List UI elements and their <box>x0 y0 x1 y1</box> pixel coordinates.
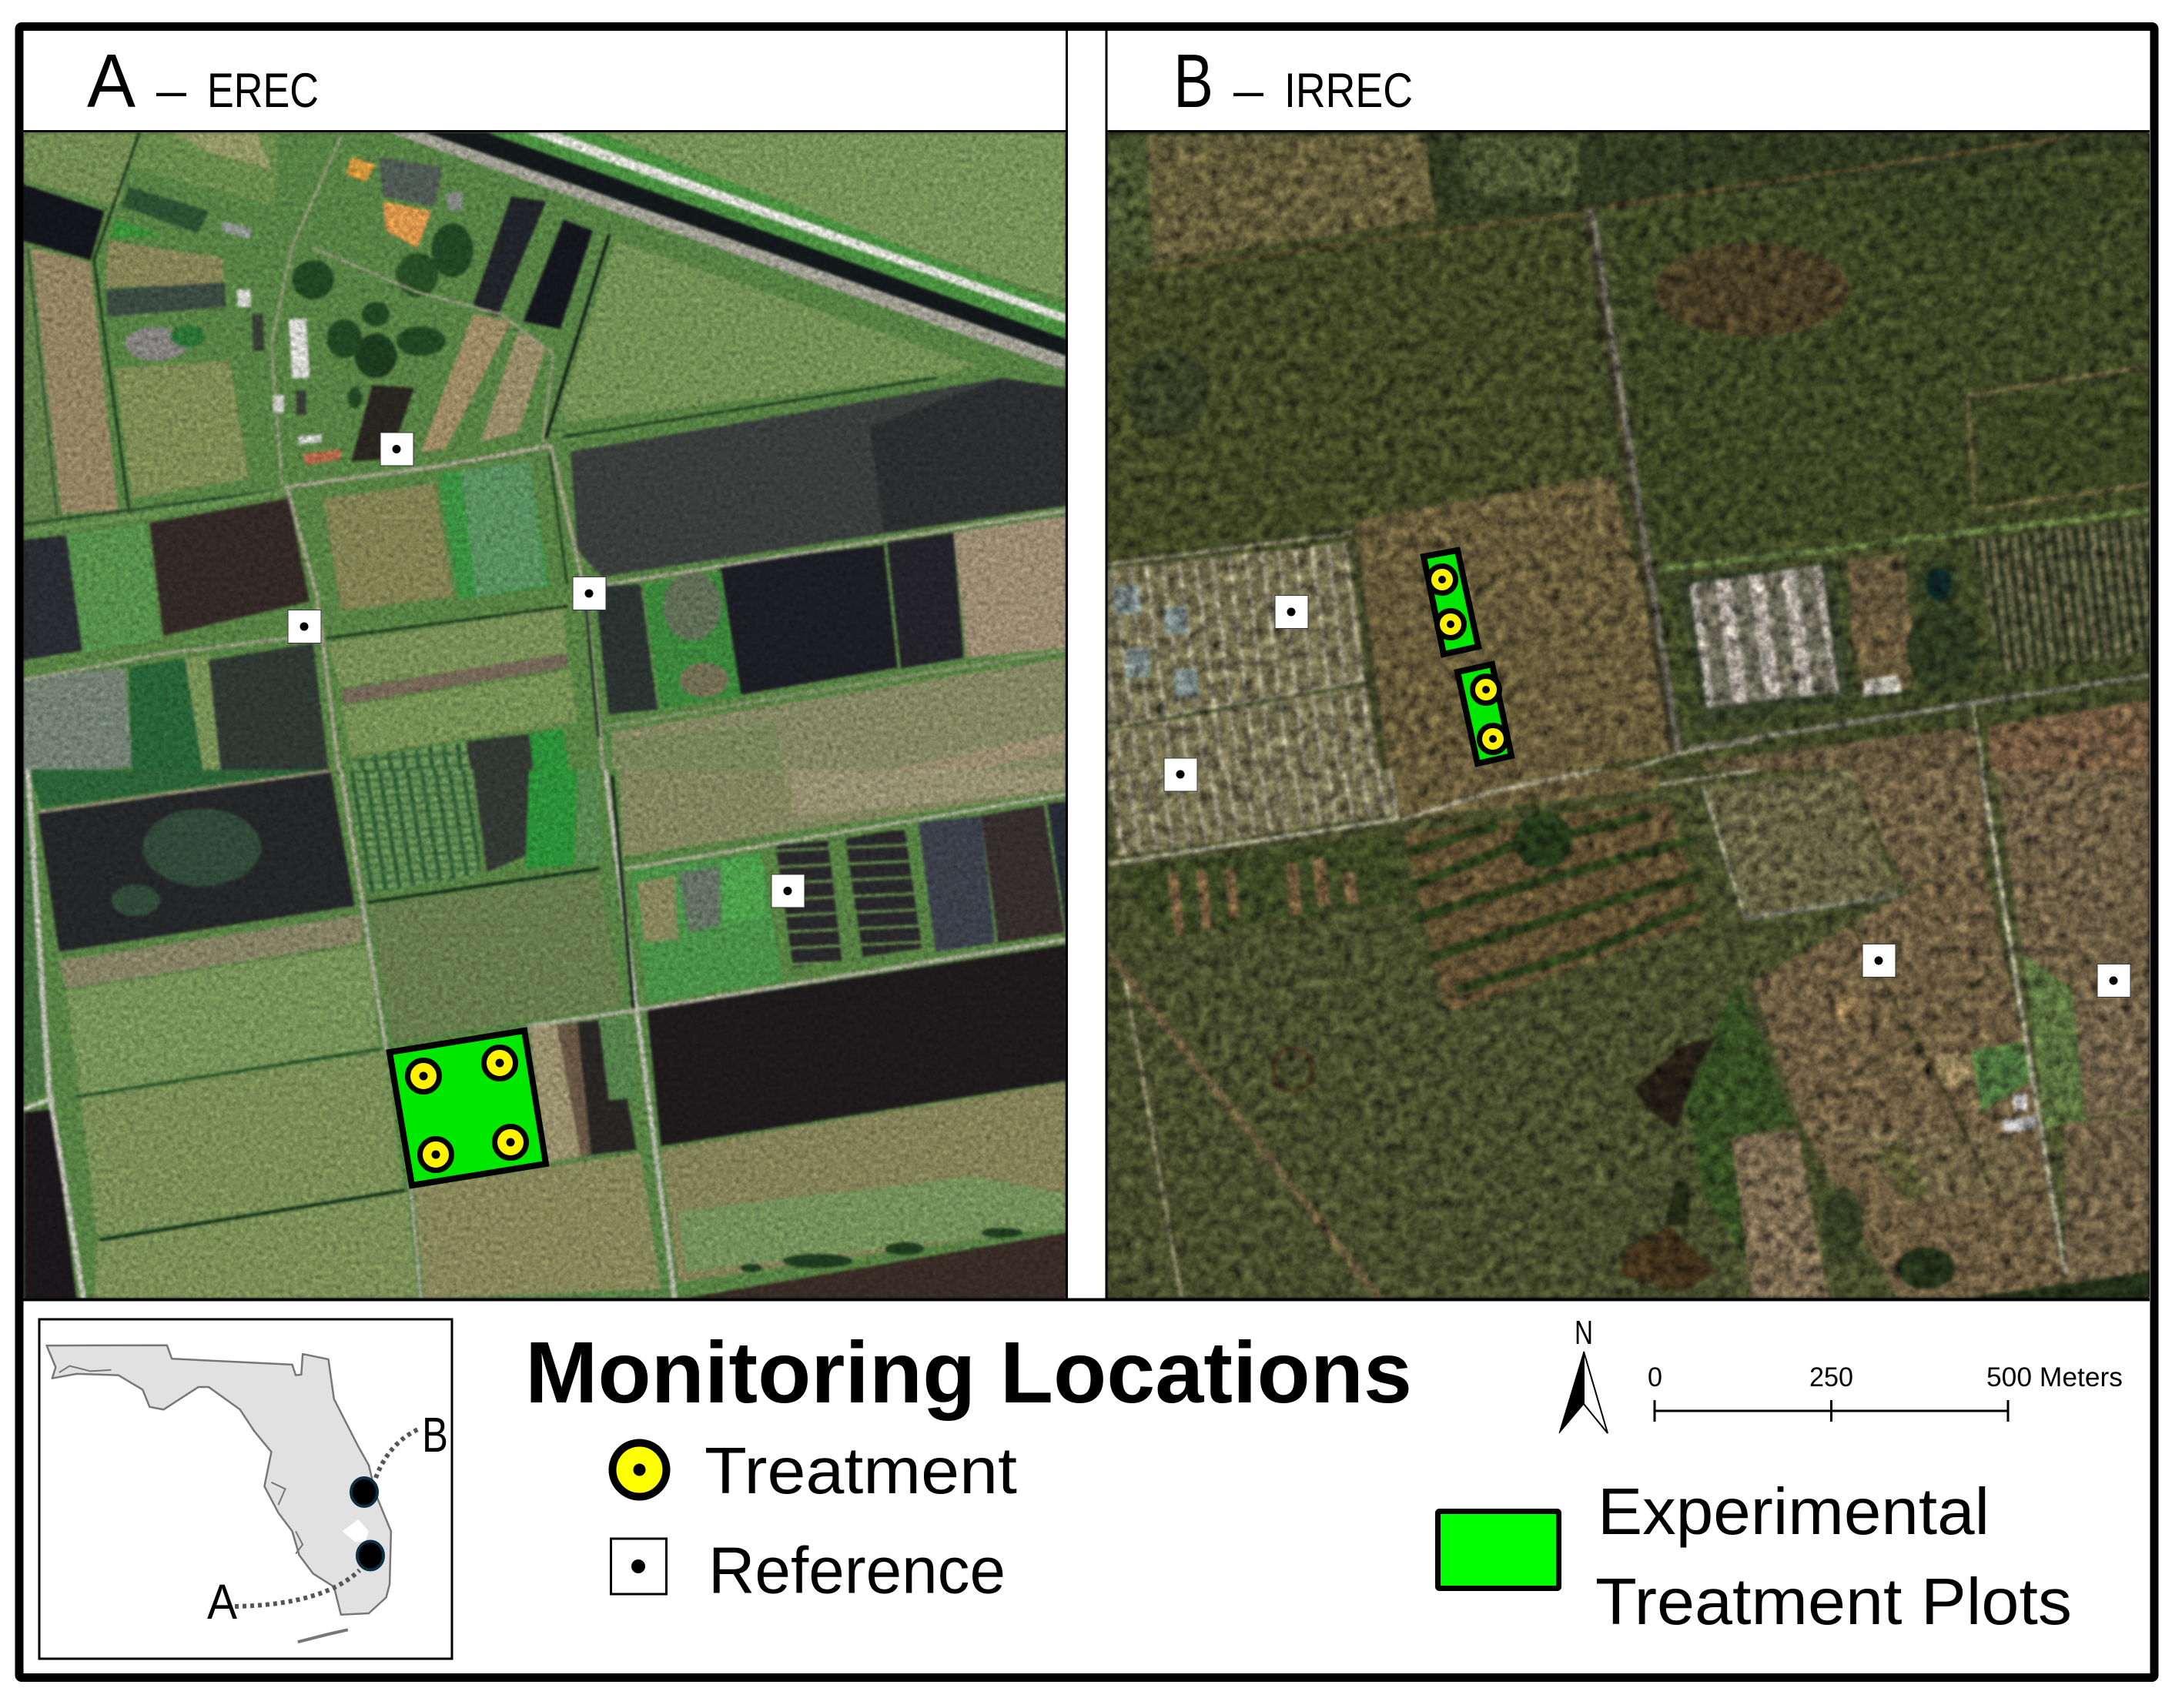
leader lines <box>235 1429 418 1606</box>
header band: B - IRREC: B <box>1173 38 1213 123</box>
treatment markers A <box>408 1047 527 1170</box>
treatment markers B <box>1429 567 1506 753</box>
reference markers map A <box>288 433 805 907</box>
campus buildings and trees <box>221 157 474 466</box>
legend: treatment label: Treatment <box>704 1435 1017 1508</box>
header band: A - EREC: EREC <box>207 64 319 118</box>
experimental plots B with treatment markers <box>1424 550 1511 764</box>
scale bar: 0 <box>1648 1362 1662 1392</box>
header band: B - IRREC: – <box>1233 64 1263 118</box>
header band: A - EREC: A <box>87 38 136 123</box>
legend: treatment symbol <box>613 1442 667 1496</box>
Florida state outline <box>47 1345 391 1642</box>
inset labels: B <box>422 1407 448 1462</box>
legend: experimental plots label <box>1595 1476 2072 1639</box>
experimental plot A with treatment markers <box>390 1031 546 1185</box>
scale bar: 500 Meters <box>1986 1362 2123 1392</box>
legend: reference symbol <box>611 1539 667 1594</box>
scale bar: 250 <box>1809 1362 1853 1392</box>
panel dividers <box>23 31 2150 1299</box>
panel: map B IRREC satellite image <box>1091 118 2182 1303</box>
legend: reference label: Reference <box>708 1535 1006 1607</box>
inset map of Florida <box>39 1319 452 1659</box>
reference markers map B <box>1164 596 2130 998</box>
header band: B - IRREC: IRREC <box>1284 64 1413 118</box>
north arrow: N <box>1575 1314 1593 1352</box>
header band: B - IRREC <box>1173 38 1413 123</box>
inset labels: A <box>207 1574 237 1629</box>
site dots <box>351 1478 383 1570</box>
legend: experimental plots label: Experimental <box>1598 1476 1990 1549</box>
inset labels <box>207 1407 448 1629</box>
header band: A - EREC: – <box>156 64 186 118</box>
header band: A - EREC <box>87 38 319 123</box>
legend: experimental plots swatch <box>1438 1512 1558 1589</box>
scale bar <box>1648 1362 2123 1422</box>
north arrow <box>1559 1314 1608 1433</box>
legend: experimental plots label: Treatment Plots <box>1595 1566 2072 1639</box>
legend title: Monitoring Locations <box>525 1324 1412 1421</box>
panel: map A EREC satellite image <box>0 118 1091 1303</box>
